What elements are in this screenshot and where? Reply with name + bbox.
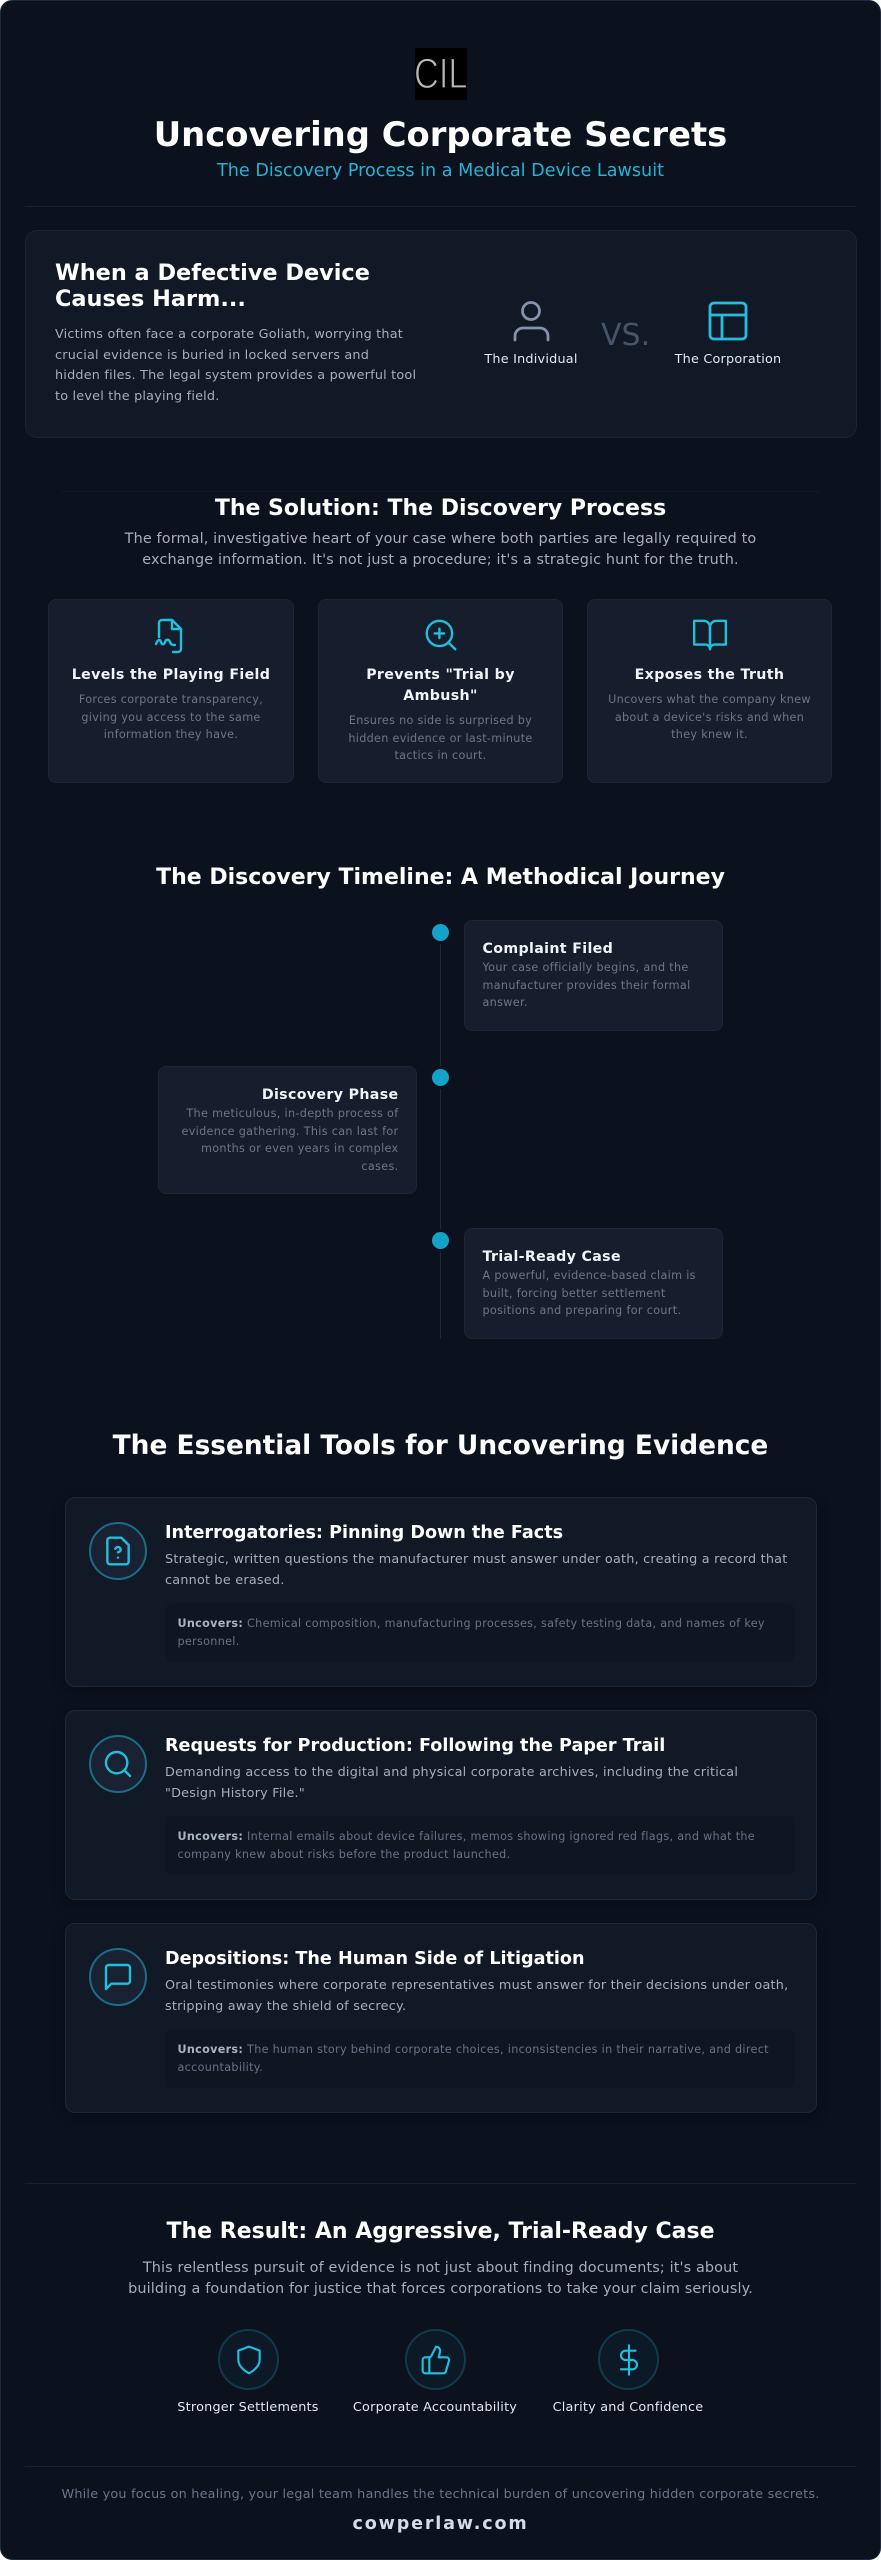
timeline dot 2 [432,1069,449,1086]
step text [181,1107,398,1173]
panel heading [55,260,370,312]
tool title: Interrogatories: Pinning Down the Facts [165,1523,563,1543]
tool card: depositions [64,1923,816,2113]
step text [482,961,691,1009]
icon: individual [514,301,550,342]
tool icon: message [89,1948,147,2006]
step text: manufacturer provides their formal [482,979,691,992]
step text: built, forcing better settlement [482,1287,666,1300]
step text: The meticulous, in-depth process of [186,1107,398,1120]
timeline card: trial-ready case [464,1228,723,1339]
title: Uncovering Corporate Secrets [154,115,727,154]
step text: A powerful, evidence-based claim is [482,1269,696,1282]
step title: Discovery Phase [262,1087,398,1103]
card text [79,693,263,741]
card text: Forces corporate transparency, [79,693,263,706]
solution description [124,531,756,568]
result description: This relentless pursuit of evidence is not just about finding documents; it's about [143,2260,738,2276]
tool description [165,1552,787,1588]
step text: positions and preparing for court. [482,1304,681,1317]
panel body text: crucial evidence is buried in locked servers and [55,348,369,363]
tool description: Demanding access to the digital and physical corporate archives, including the critical [165,1765,738,1780]
tool title: Depositions: The Human Side of Litigation [165,1949,585,1969]
solution description: The formal, investigative heart of your case where both parties are legally required to [125,531,756,547]
card text: Ensures no side is surprised by [349,714,532,727]
step title: Trial-Ready Case [482,1249,621,1265]
heading: timeline: The Discovery Timeline: A Methodical Journey [156,865,725,890]
card text [348,714,533,762]
icon: corporation [708,302,748,340]
uncovers box [166,1603,794,1662]
uncovers text: Uncovers: Chemical composition, manufacturing processes, safety testing data, and names of key [178,1617,765,1630]
timeline dot 3 [432,1232,449,1249]
panel body text: Victims often face a corporate Goliath, worrying that [55,327,403,342]
heading: the result: The Result: An Aggressive, Trial-Ready Case [166,2219,714,2244]
tool description: "Design History File." [165,1786,305,1801]
card text: giving you access to the same [81,711,261,724]
timeline dot 1 [432,924,449,941]
uncovers text: company knew about risks before the product launched. [178,1848,510,1861]
result label: stronger settlements: Stronger Settlements [177,2400,319,2415]
panel body text [55,327,416,404]
result description: building a foundation for justice that forces corporations to take your claim seriously. [128,2281,753,2297]
step text: months or even years in complex [201,1142,398,1155]
card text: about a device's risks and when [615,711,804,724]
icon: open book [693,620,727,650]
uncovers box [166,1816,794,1875]
subtitle: The Discovery Process in a Medical Device Lawsuit [217,161,664,181]
solution description: exchange information. It's not just a procedure; it's a strategic hunt for the truth. [142,552,739,568]
tool description: cannot be erased. [165,1573,285,1588]
timeline card: discovery phase [158,1066,417,1194]
result icon: dollar [598,2329,659,2390]
tool description [165,1765,738,1801]
result label: corporate accountability: Corporate Accountability [353,2400,517,2415]
result icon: thumbs up [405,2329,466,2390]
header logo: CIL [415,50,467,98]
tool description: stripping away the shield of secrecy. [165,1999,406,2014]
icon: file signature [154,618,182,654]
tool card: interrogatories [64,1497,816,1687]
card text: hidden evidence or last-minute [348,732,533,745]
label: the individual: The Individual [484,352,578,367]
footer text: While you focus on healing, your legal team handles the technical burden of uncovering hidden corporate secrets. [61,2487,820,2502]
tool card: requests for production [64,1710,816,1900]
step text: Your case officially begins, and the [482,961,689,974]
timeline card: complaint filed [464,920,723,1031]
result description [128,2260,753,2297]
card: exposes the truth [587,599,832,783]
card title: Levels the Playing Field [72,667,270,683]
tool icon: file question [89,1522,147,1580]
card text: Uncovers what the company knew [608,693,811,706]
tool title: Requests for Production: Following the Paper Trail [165,1736,665,1756]
timeline axis [440,920,441,1339]
card text: tactics in court. [394,749,487,762]
card text: they knew it. [671,728,748,741]
heading: the solution: The Solution: The Discovery Process [215,496,666,521]
step text [482,1269,696,1317]
card title: Prevents "Trial by [366,667,515,683]
tool description: Oral testimonies where corporate representatives must answer for their decisions under oath, [165,1978,788,1993]
card title: Exposes the Truth [635,667,784,683]
tool description: Strategic, written questions the manufacturer must answer under oath, creating a record that [165,1552,787,1567]
card text [608,693,811,741]
panel heading: Causes Harm... [55,286,246,312]
step text: evidence gathering. This can last for [181,1125,398,1138]
result label: clarity and confidence: Clarity and Confidence [553,2400,703,2415]
tool description [165,1978,788,2014]
step text: answer. [482,996,528,1009]
card title: Ambush" [403,688,478,704]
panel: when a defective device causes harm [25,230,857,438]
panel heading: When a Defective Device [55,260,370,286]
panel body text: hidden files. The legal system provides a powerful tool [55,368,416,383]
vs text: VS. [601,318,650,353]
card: prevents trial by ambush [318,599,563,783]
label: the corporation: The Corporation [675,352,781,367]
uncovers text: Uncovers: Internal emails about device failures, memos showing ignored red flags, and what the [178,1830,755,1843]
uncovers text [178,1617,765,1648]
panel body text: to level the playing field. [55,389,220,404]
card title [366,667,515,704]
result icon: shield [218,2329,279,2390]
heading: essential tools: The Essential Tools for Uncovering Evidence [113,1430,768,1461]
icon: zoom in [426,620,456,650]
card: levels the playing field [48,599,294,783]
uncovers text: Uncovers: The human story behind corporate choices, inconsistencies in their narrative, and direct [178,2043,769,2056]
uncovers box [166,2029,794,2088]
step title: Complaint Filed [482,941,613,957]
uncovers text: personnel. [178,1635,240,1648]
uncovers text [178,1830,755,1861]
step text: cases. [361,1160,398,1173]
card text: information they have. [104,728,238,741]
footer website: cowperlaw.com [353,2514,528,2534]
uncovers text: accountability. [178,2061,263,2074]
tool icon: search [89,1735,147,1793]
uncovers text [178,2043,769,2074]
